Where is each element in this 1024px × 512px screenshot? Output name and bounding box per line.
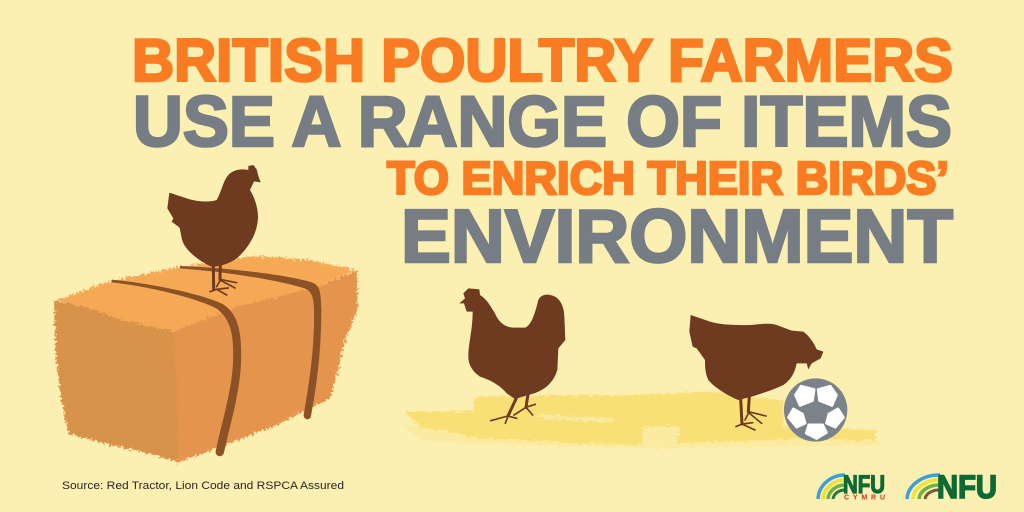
bale left face	[54, 301, 178, 462]
bale top face	[57, 256, 357, 332]
source note: Source: Red Tractor, Lion Code and RSPCA Assured	[62, 480, 344, 492]
icon: football	[784, 378, 847, 442]
standing hen	[459, 288, 565, 423]
title: TO ENRICH THEIR BIRDS’	[387, 152, 949, 204]
title	[132, 27, 953, 278]
logo: NFU: NFU	[937, 469, 997, 505]
title: BRITISH POULTRY FARMERS	[132, 27, 953, 94]
strap left	[112, 280, 241, 456]
title: ENVIRONMENT	[401, 194, 953, 278]
strap right	[180, 266, 321, 419]
title: USE A RANGE OF ITEMS	[133, 83, 952, 162]
logo: NFU	[907, 469, 997, 505]
pecking hen	[689, 315, 823, 430]
bale right face	[173, 271, 357, 463]
hen on the bale	[167, 165, 261, 295]
logo: NFU Cymru	[818, 471, 885, 502]
ground straw	[400, 392, 880, 448]
logo: NFU Cymru: CYMRU	[844, 494, 885, 502]
hay bale	[54, 256, 357, 463]
logo: NFU Cymru: NFU	[843, 471, 885, 499]
